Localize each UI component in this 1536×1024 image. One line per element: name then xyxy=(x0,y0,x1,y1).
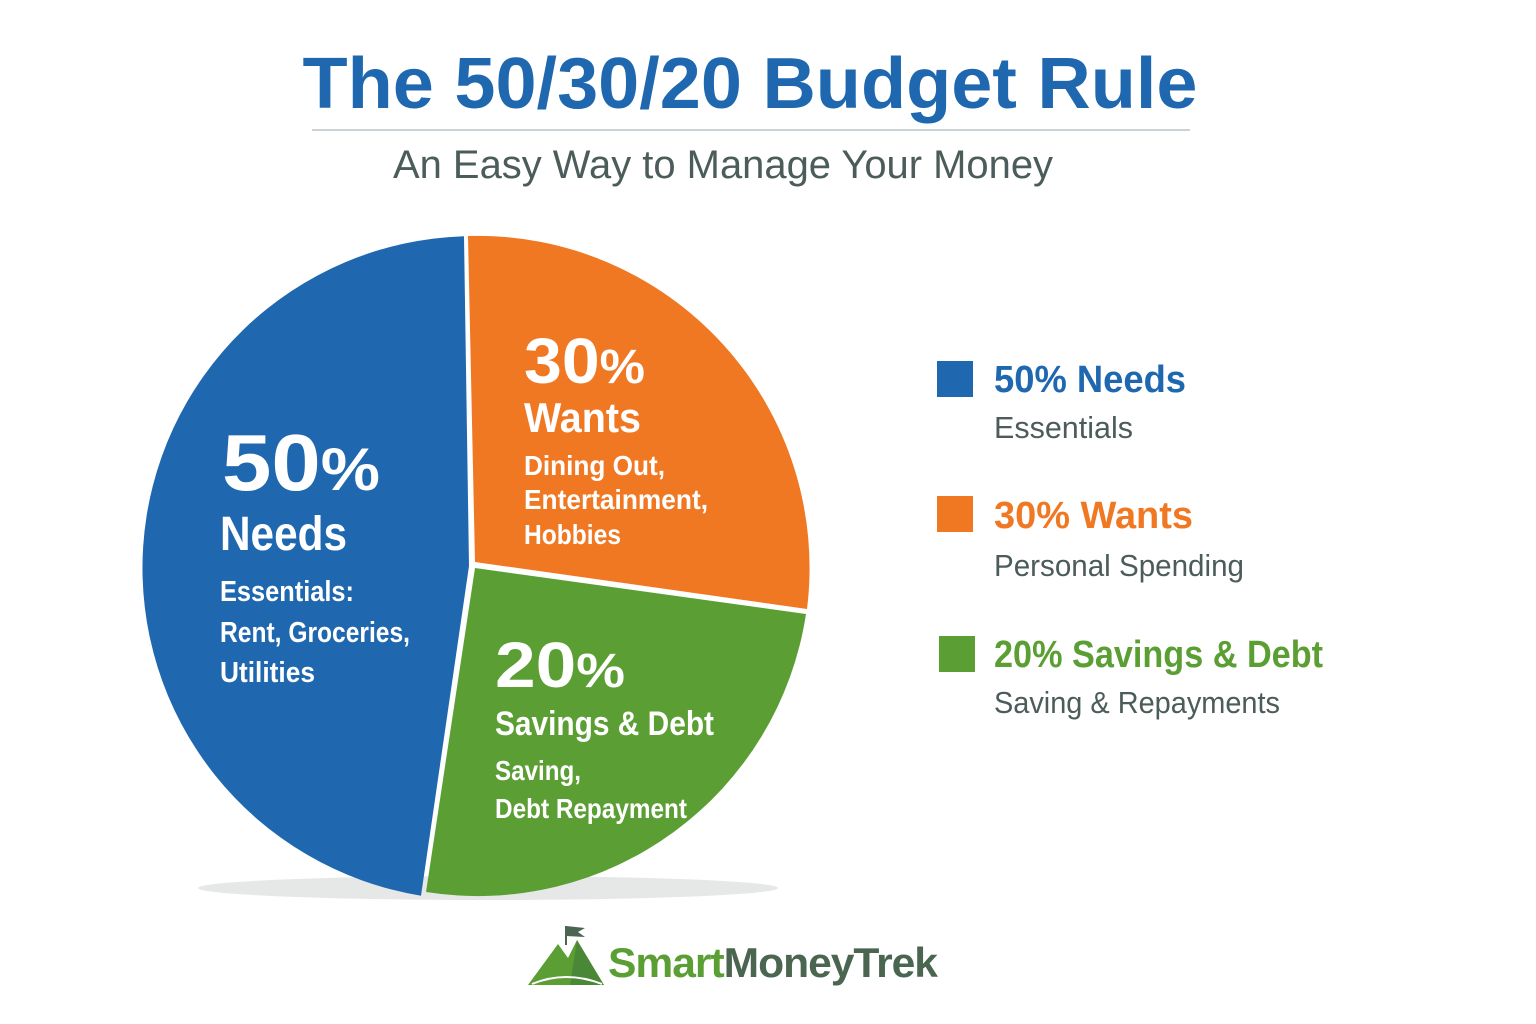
slice: savings: 20% xyxy=(495,629,625,701)
legend item: needs: 50% Needs xyxy=(994,359,1186,401)
logo xyxy=(528,926,939,986)
legend xyxy=(937,359,1323,720)
pie shadow xyxy=(198,876,778,900)
slice: wants: Wants xyxy=(524,394,641,441)
legend item: wants: 30% Wants xyxy=(994,495,1193,537)
slice: savings xyxy=(426,568,806,896)
slice: needs: Utilities xyxy=(220,657,315,689)
slice: needs: 50% xyxy=(222,418,380,507)
slice: wants: Hobbies xyxy=(524,519,621,550)
legend item: needs xyxy=(937,359,1186,445)
slice: needs: Essentials: xyxy=(220,576,354,608)
slice: needs: Needs xyxy=(220,508,347,561)
slice: wants xyxy=(468,236,810,609)
pie chart xyxy=(142,236,810,896)
legend item: needs: Essentials xyxy=(994,410,1133,445)
slice: wants: 30% xyxy=(524,325,645,397)
icon: mountain with flag xyxy=(528,926,604,985)
slice: wants: Entertainment, xyxy=(524,484,708,515)
slice: wants: Dining Out, xyxy=(524,450,665,481)
title: The 50/30/20 Budget Rule xyxy=(302,44,1198,124)
subtitle: An Easy Way to Manage Your Money xyxy=(393,143,1053,187)
legend item: savings: 20% Savings & Debt xyxy=(994,634,1323,676)
legend item: wants xyxy=(937,495,1244,583)
slice: needs xyxy=(142,236,469,896)
legend item: wants: Personal Spending xyxy=(994,548,1244,583)
legend item: savings: Saving & Repayments xyxy=(994,685,1280,720)
legend item: savings xyxy=(939,634,1323,720)
slice: savings: Debt Repayment xyxy=(495,793,687,824)
brand name: SmartMoneyTrek xyxy=(608,939,939,986)
slice: needs: Rent, Groceries, xyxy=(220,617,410,649)
slice: savings: Saving, xyxy=(495,755,581,786)
slice: savings: Savings & Debt xyxy=(495,705,714,743)
